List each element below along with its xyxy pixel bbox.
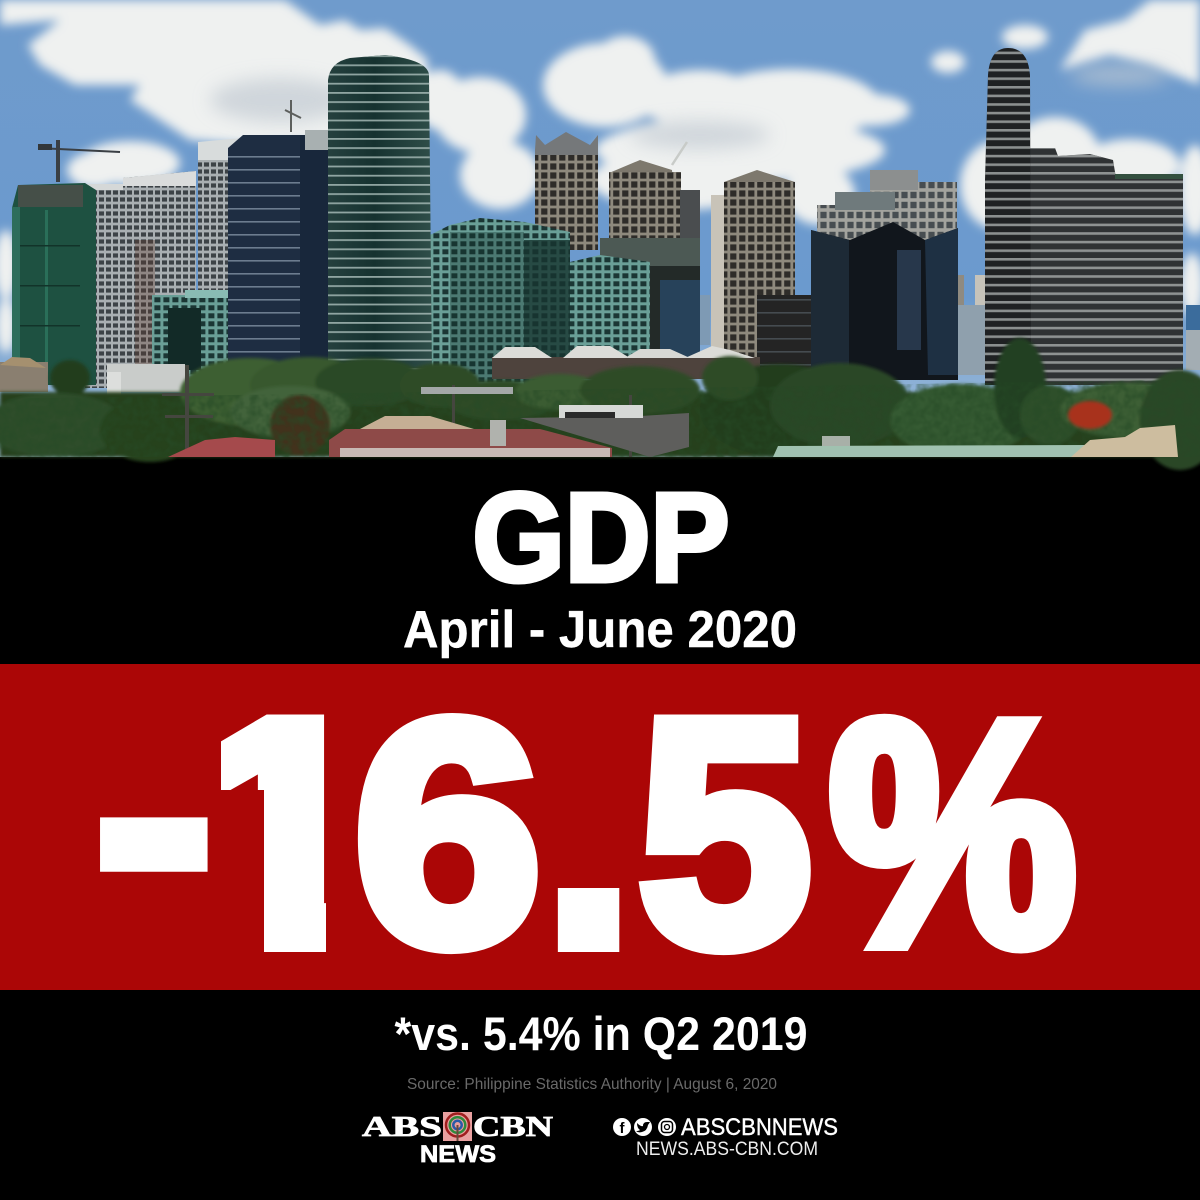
social handles: NEWS.ABS-CBN.COM bbox=[636, 1139, 818, 1160]
icon: facebook bbox=[613, 1118, 631, 1137]
headline figure: 5 bbox=[638, 654, 812, 1013]
red flowering patch bbox=[1068, 401, 1112, 429]
logo: ABS-CBN News: CBN bbox=[473, 1111, 553, 1143]
grey buildings behind glass bbox=[817, 170, 957, 255]
low dark block bbox=[757, 295, 815, 370]
cloud shadows bbox=[210, 65, 1170, 149]
grey tower next to green bbox=[85, 184, 123, 388]
photo: Manila skyline bbox=[0, 0, 1200, 470]
icon: instagram bbox=[658, 1118, 676, 1136]
rooftops bbox=[168, 387, 1178, 457]
tree canopy bbox=[0, 338, 1200, 470]
comparison note: *vs. 5.4% in Q2 2019 bbox=[394, 1007, 808, 1060]
low white-roof houses bbox=[492, 346, 760, 379]
headline figure bbox=[100, 713, 1076, 956]
clouds bbox=[0, 0, 1200, 353]
title: GDP: GDP bbox=[472, 467, 730, 608]
subtitle: period: April - June 2020 bbox=[403, 601, 797, 659]
grey tower 3 bbox=[123, 171, 196, 370]
icon: twitter bbox=[634, 1118, 652, 1136]
headline figure: 6 bbox=[354, 656, 541, 1011]
leaf texture bbox=[0, 380, 1156, 457]
small houses left bbox=[0, 357, 185, 404]
round glass tower bbox=[328, 55, 432, 375]
curved round tower bbox=[985, 48, 1031, 385]
social handles: ABSCBNNEWS bbox=[681, 1114, 838, 1141]
red banner bbox=[0, 664, 1200, 990]
distant towers bbox=[700, 275, 1200, 375]
dark blue tower bbox=[228, 100, 328, 375]
headline figure: % bbox=[829, 657, 1076, 1011]
tan tower 2 bbox=[711, 170, 795, 357]
tower centre bbox=[535, 132, 598, 250]
headline figure: - bbox=[95, 637, 213, 996]
icon: facebook: f bbox=[620, 1120, 626, 1137]
source line: Source: Philippine Statistics Authority | August 6, 2020 bbox=[407, 1076, 777, 1093]
grey tower 4 bbox=[198, 138, 242, 295]
headline figure: . bbox=[544, 654, 633, 1013]
logo: ABS-CBN News: NEWS bbox=[420, 1141, 496, 1168]
icon: ABS-CBN rings bbox=[443, 1112, 472, 1141]
social handles bbox=[613, 1114, 838, 1160]
utility poles bbox=[162, 365, 632, 457]
logo: ABS-CBN News bbox=[362, 1111, 553, 1168]
mint mid-rise block bbox=[430, 218, 650, 385]
green netted building bbox=[12, 183, 96, 385]
curved residential mass bbox=[1030, 148, 1183, 385]
tower crane bbox=[38, 140, 120, 182]
glass building bbox=[811, 222, 958, 380]
logo: ABS-CBN News: ABS bbox=[362, 1111, 442, 1143]
headline figure: 1 bbox=[184, 653, 381, 1012]
dark construction block bbox=[600, 238, 700, 363]
tan tower left of glass bbox=[609, 142, 700, 300]
small teal building bbox=[152, 290, 228, 375]
